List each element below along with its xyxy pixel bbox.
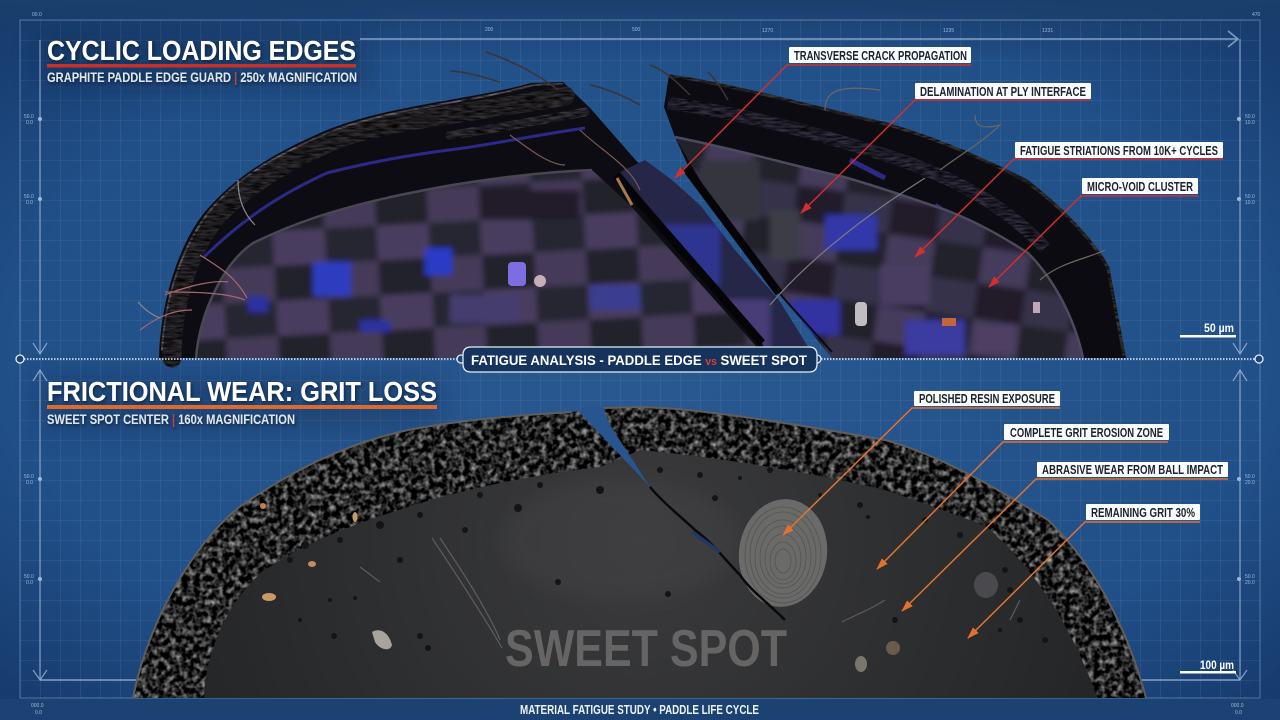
subtitle: SWEET SPOT CENTER | 160x MAGNIFICATION xyxy=(47,412,295,427)
callout: remaining grit 30% xyxy=(968,504,1200,638)
disc gritty rim xyxy=(133,407,1146,698)
loose fibres xyxy=(138,52,1105,330)
tick marks and tiny labels: 0.0 xyxy=(26,200,33,206)
callout: micro-void cluster: MICRO-VOID CLUSTER xyxy=(1087,180,1193,194)
callout: abrasive wear from ball impact xyxy=(902,462,1228,611)
tick marks and tiny labels: 000.0 xyxy=(1231,703,1244,709)
tick marks and tiny labels: 10.0 xyxy=(1245,200,1255,206)
thumbprint polished resin patch xyxy=(732,493,834,613)
stencil text: SWEET SPOT: SWEET SPOT xyxy=(505,620,787,678)
callout: transverse crack propagation: TRANSVERSE CRACK PROPAGATION xyxy=(794,49,967,63)
tick marks and tiny labels: 1235 xyxy=(943,28,954,34)
polished ellipse glow xyxy=(500,480,740,600)
heading: FRICTIONAL WEAR: GRIT LOSS xyxy=(47,376,437,407)
title block: cyclic loading edges xyxy=(47,35,357,85)
tick marks and tiny labels: 1231 xyxy=(1042,28,1053,34)
callout: transverse crack propagation xyxy=(675,47,971,178)
callout: remaining grit 30%: REMAINING GRIT 30% xyxy=(1091,506,1195,520)
tick marks and tiny labels: 20.0 xyxy=(1245,580,1255,586)
tick marks and tiny labels: 0.0 xyxy=(26,580,33,586)
callout: fatigue striations: FATIGUE STRIATIONS FROM 10K+ CYCLES xyxy=(1020,144,1218,158)
subtitle: GRAPHITE PADDLE EDGE GUARD | 250x MAGNIFICATION xyxy=(47,70,357,85)
left weave panel xyxy=(197,170,756,358)
tick marks and tiny labels: 0.0 xyxy=(1235,710,1242,716)
title block: frictional wear xyxy=(47,376,437,427)
disc outer edge xyxy=(133,407,1146,698)
tick marks and tiny labels: 0.0 xyxy=(26,480,33,486)
tick marks and tiny labels: 1270 xyxy=(762,28,773,34)
tick marks and tiny labels: 0.0 xyxy=(35,710,42,716)
heading: CYCLIC LOADING EDGES xyxy=(47,35,356,66)
scale bar: 100 µm: 100 µm xyxy=(1200,658,1234,672)
callout: delamination at ply interface xyxy=(801,83,1091,213)
callout: micro-void cluster xyxy=(989,178,1198,287)
footer: MATERIAL FATIGUE STUDY • PADDLE LIFE CYCLE xyxy=(520,703,759,717)
tick marks and tiny labels: 470 xyxy=(1252,12,1261,18)
right weave panel xyxy=(676,138,1082,358)
scratches xyxy=(360,538,1020,648)
crack wedge and fissure xyxy=(578,407,650,487)
tick marks and tiny labels: 50.0 xyxy=(1245,114,1255,120)
middle shard between crack bands xyxy=(620,160,808,346)
callout: polished resin exposure: POLISHED RESIN EXPOSURE xyxy=(919,392,1055,406)
tick marks and tiny labels: 50.0 xyxy=(1245,194,1255,200)
right blue streaks xyxy=(850,160,985,240)
tick marks and tiny labels: 10.0 xyxy=(1245,120,1255,126)
right fragment silhouette xyxy=(664,75,1126,358)
callout: complete grit erosion zone xyxy=(877,424,1169,569)
divider with centre label: FATIGUE ANALYSIS - PADDLE EDGE vs SWEET SPOT xyxy=(471,352,807,368)
left outer lamina xyxy=(162,84,585,358)
tick marks and tiny labels: 00.0 xyxy=(32,12,42,18)
left blue streak in delamination gap xyxy=(204,128,585,257)
left fragment silhouette xyxy=(159,82,775,358)
right outer lamina xyxy=(668,76,1124,356)
crack band edges xyxy=(616,175,762,343)
worn smooth centre xyxy=(204,450,1097,698)
tick marks and tiny labels: 20.0 xyxy=(1245,480,1255,486)
tick marks and tiny labels: 000.0 xyxy=(31,703,44,709)
tick marks and tiny labels: 50.0 xyxy=(24,114,34,120)
tick marks and tiny labels: 50.0 xyxy=(1245,574,1255,580)
callout: complete grit erosion zone: COMPLETE GRIT EROSION ZONE xyxy=(1010,426,1163,440)
tick marks and tiny labels: 50.0 xyxy=(24,194,34,200)
callout: fatigue striations xyxy=(915,142,1223,257)
tick marks and tiny labels: 200 xyxy=(485,27,494,33)
scale bar: 50 µm xyxy=(1180,321,1236,338)
panel: upper micrograph, graphite edge guard xyxy=(138,52,1126,370)
callout: polished resin exposure xyxy=(783,391,1060,535)
divider with centre label xyxy=(16,347,1263,372)
heading underline xyxy=(47,405,437,409)
scale bar: 50 µm: 50 µm xyxy=(1204,321,1234,335)
tick marks and tiny labels: 50.0 xyxy=(1245,474,1255,480)
callout: abrasive wear from ball impact: ABRASIVE WEAR FROM BALL IMPACT xyxy=(1042,463,1223,477)
tick marks and tiny labels: 0.0 xyxy=(26,120,33,126)
tick marks and tiny labels: 50.0 xyxy=(24,574,34,580)
callout: delamination at ply interface: DELAMINATION AT PLY INTERFACE xyxy=(920,85,1086,99)
debris and loose grit xyxy=(260,467,1048,672)
tick marks and tiny labels: 500 xyxy=(632,27,641,33)
heading underline xyxy=(47,64,356,68)
tick marks and tiny labels: 50.0 xyxy=(24,474,34,480)
scale bar: 100 µm xyxy=(1180,658,1236,674)
panel: lower micrograph, sweet spot disc xyxy=(133,407,1146,698)
